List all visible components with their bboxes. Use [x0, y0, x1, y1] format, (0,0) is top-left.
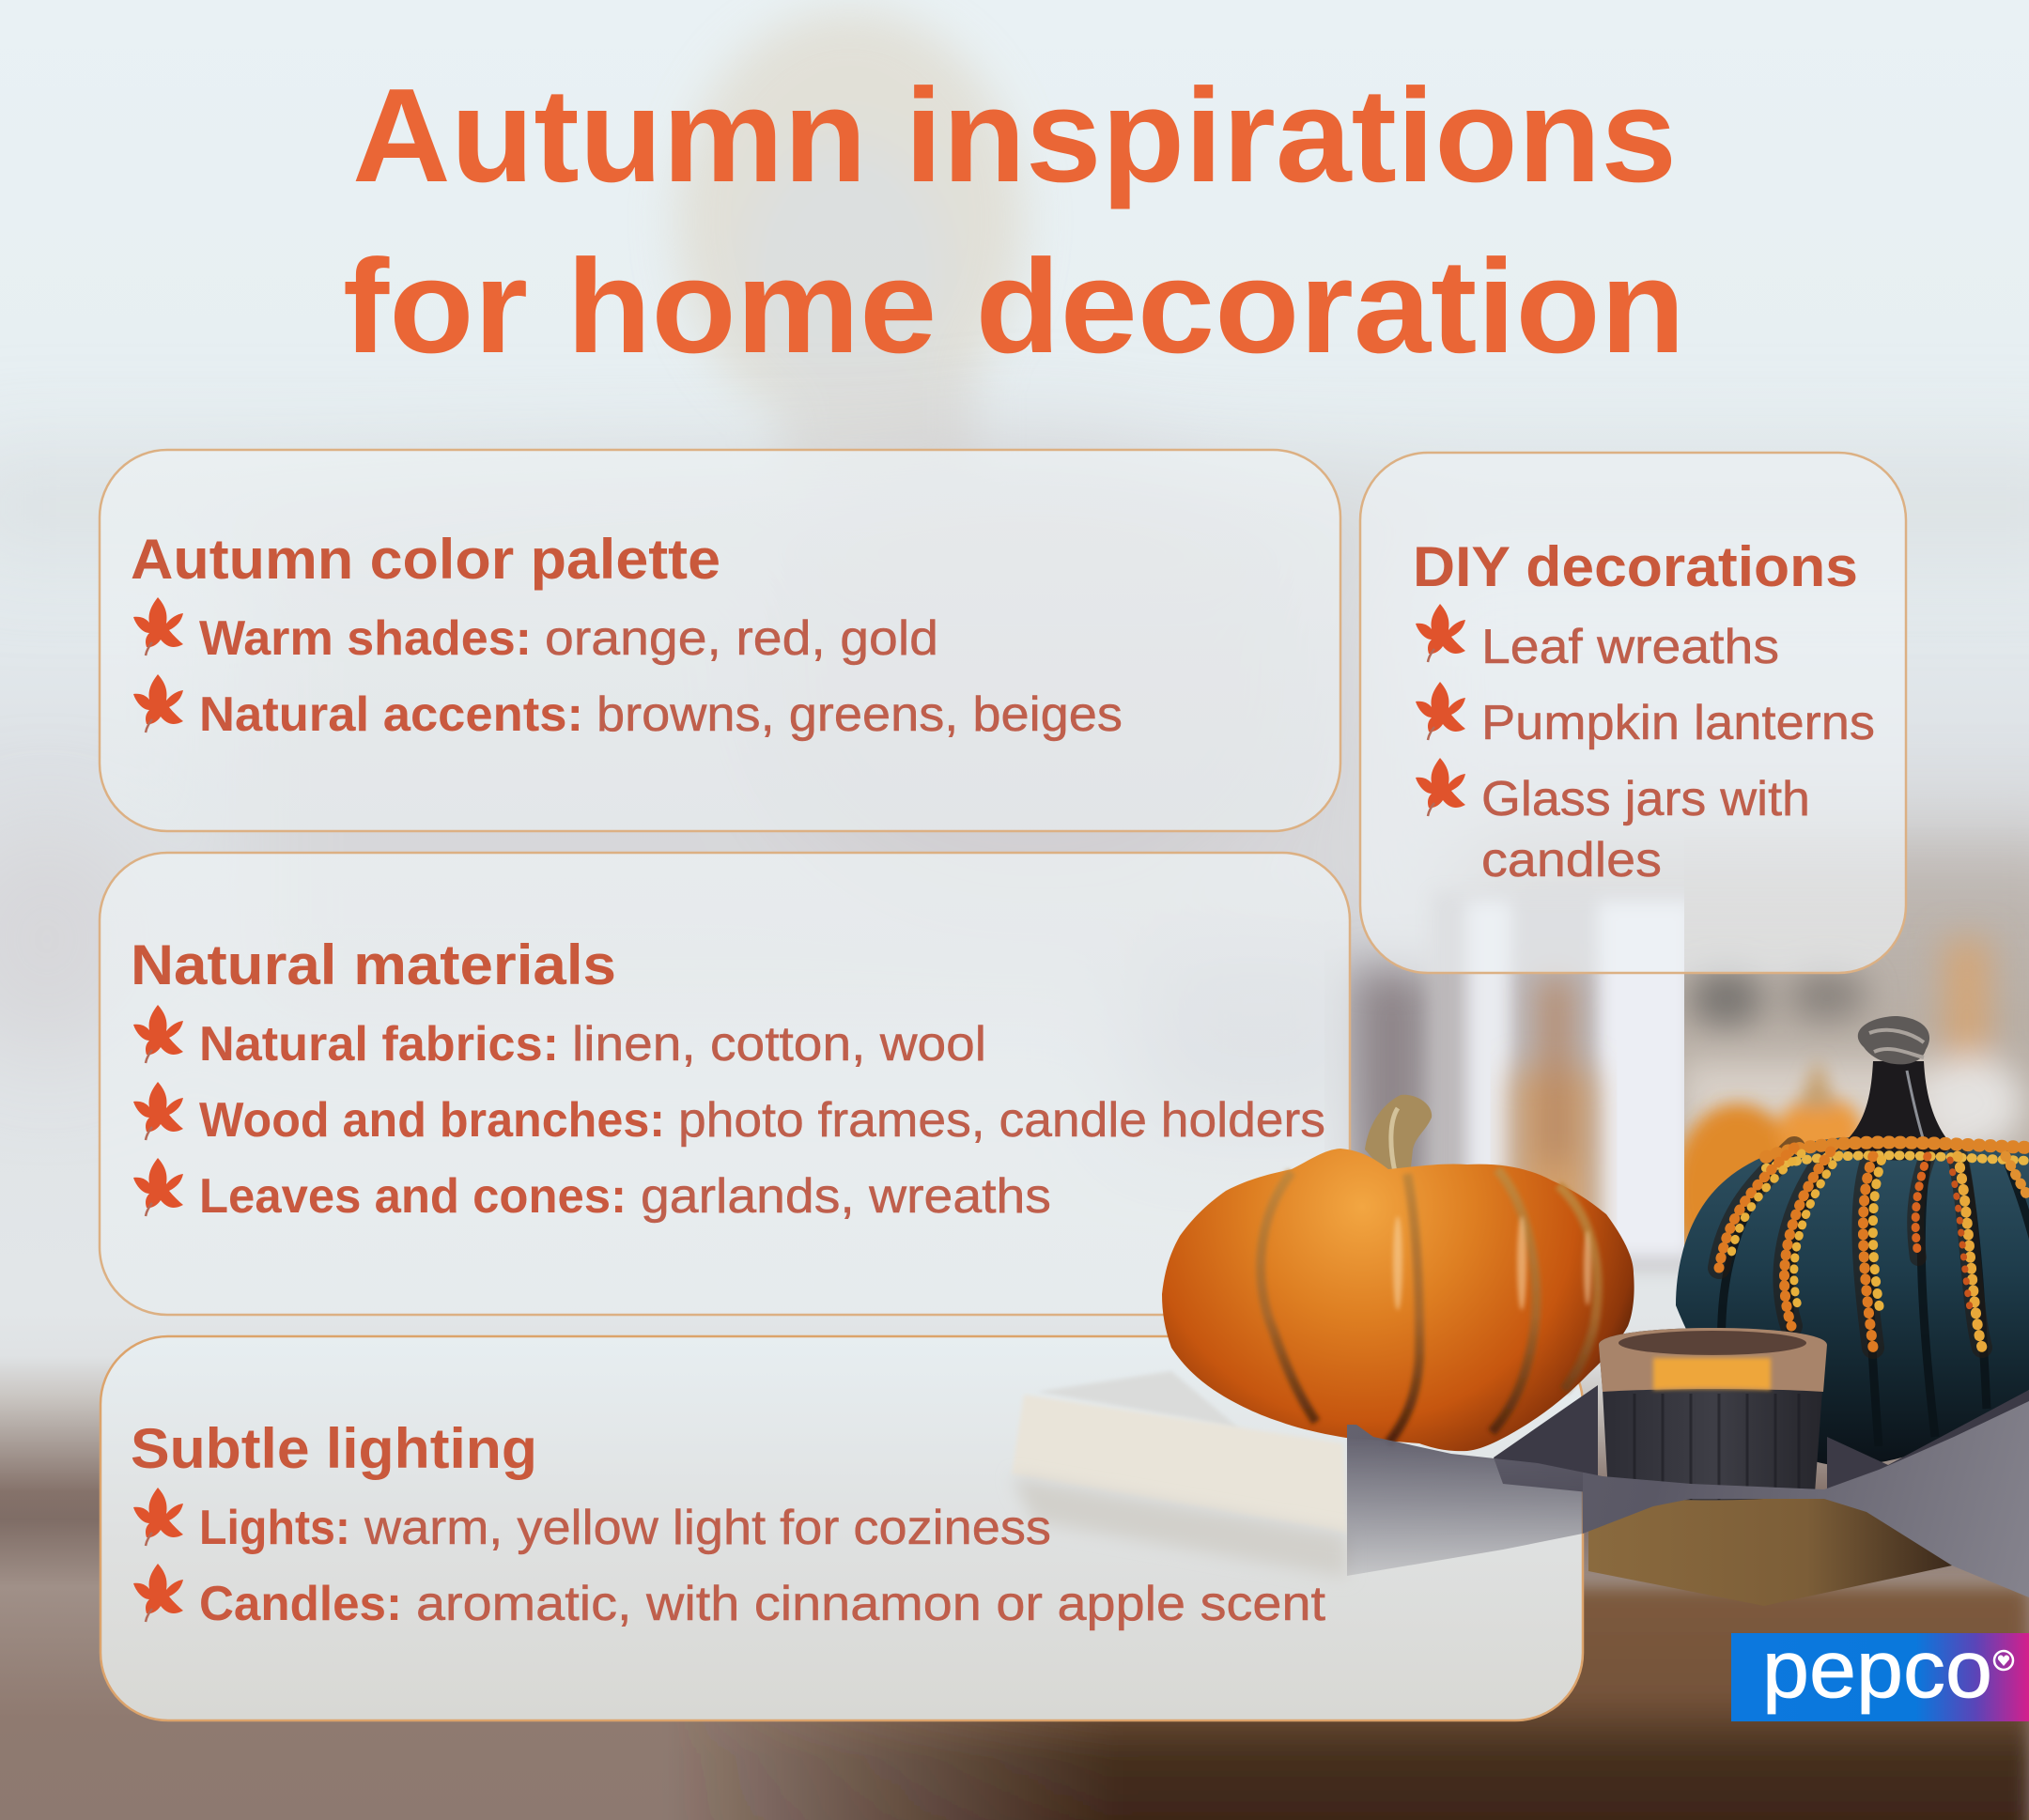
item: wood and branches: Wood and branches:: [199, 1093, 665, 1148]
blurred glass jar: [1433, 892, 1705, 1277]
blurred background right of jar: [1684, 898, 2029, 1245]
panel: subtle lighting: [101, 1336, 1583, 1720]
icon: heart badge: [1994, 1651, 2013, 1670]
title: [343, 61, 1685, 381]
candle in ribbed glass: [1599, 1328, 1827, 1501]
heading: natural materials: Natural materials: [131, 933, 616, 996]
sequin band and drips: [1719, 1142, 2029, 1348]
item: wood and branches: photo frames, candle holders: [678, 1093, 1325, 1148]
item: natural accents: [133, 674, 1123, 742]
blurred person: [676, 9, 1024, 488]
dark blue pumpkin: [1676, 1016, 2029, 1465]
item: natural accents: Natural accents:: [199, 687, 583, 742]
heading: DIY decorations: DIY decorations: [1413, 535, 1858, 598]
logo: pepco: [1731, 1625, 2029, 1721]
title: for home decoration: [343, 232, 1685, 381]
item: leaves and cones: Leaves and cones:: [199, 1169, 627, 1224]
highlights: [1393, 1216, 1591, 1310]
item: natural fabrics: linen, cotton, wool: [572, 1017, 986, 1072]
item: warm shades: [133, 597, 938, 666]
item: leaf wreaths: Leaf wreaths: [1481, 620, 1779, 674]
item: pumpkin lanterns: [1416, 682, 1875, 750]
wooden box: [1588, 1493, 1952, 1606]
item: candles: [133, 1564, 1326, 1631]
logo: pepco: pepco: [1762, 1625, 1992, 1715]
panel: natural materials: [100, 853, 1350, 1315]
item: leaf wreaths: [1416, 604, 1779, 674]
item: glass jars with candles: Glass jars with: [1481, 772, 1810, 826]
cloth: [1347, 1401, 2029, 1597]
item: wood and branches: [133, 1082, 1325, 1148]
item: pumpkin lanterns: Pumpkin lanterns: [1481, 696, 1875, 750]
item: natural accents: browns, greens, beiges: [596, 687, 1123, 742]
stem: [1838, 1061, 1954, 1161]
heading: autumn color palette: Autumn color palette: [131, 528, 720, 591]
item: leaves and cones: garlands, wreaths: [641, 1169, 1051, 1224]
item: lights: warm, yellow light for coziness: [364, 1501, 1051, 1555]
panel: DIY decorations: [1360, 453, 1906, 973]
item: glass jars with candles: candles: [1481, 833, 1662, 887]
item: natural fabrics: Natural fabrics:: [199, 1017, 559, 1072]
item: glass jars with candles: [1416, 758, 1810, 887]
item: warm shades: Warm shades:: [199, 611, 532, 666]
item: candles: aromatic, with cinnamon or apple scent: [416, 1577, 1326, 1631]
title: Autumn inspirations: [352, 61, 1677, 210]
panel: autumn color palette: [100, 450, 1340, 831]
dark cloth behind candle: [1494, 1385, 2029, 1495]
item: leaves and cones: [133, 1158, 1051, 1224]
item: lights: [133, 1488, 1051, 1555]
heading: subtle lighting: Subtle lighting: [131, 1417, 537, 1480]
table: [701, 1577, 2029, 1820]
pumpkin ribs: [1261, 1169, 1598, 1443]
item: natural fabrics: [133, 1005, 986, 1072]
lobe grooves: [1722, 1148, 2029, 1446]
item: candles: Candles:: [199, 1577, 402, 1631]
item: lights: Lights:: [199, 1501, 350, 1555]
tray seen through panel: [1012, 1371, 1347, 1578]
orange pumpkin: [1162, 1095, 1634, 1451]
item: warm shades: orange, red, gold: [545, 611, 938, 666]
mauve column left of jar: [1350, 967, 1434, 1249]
